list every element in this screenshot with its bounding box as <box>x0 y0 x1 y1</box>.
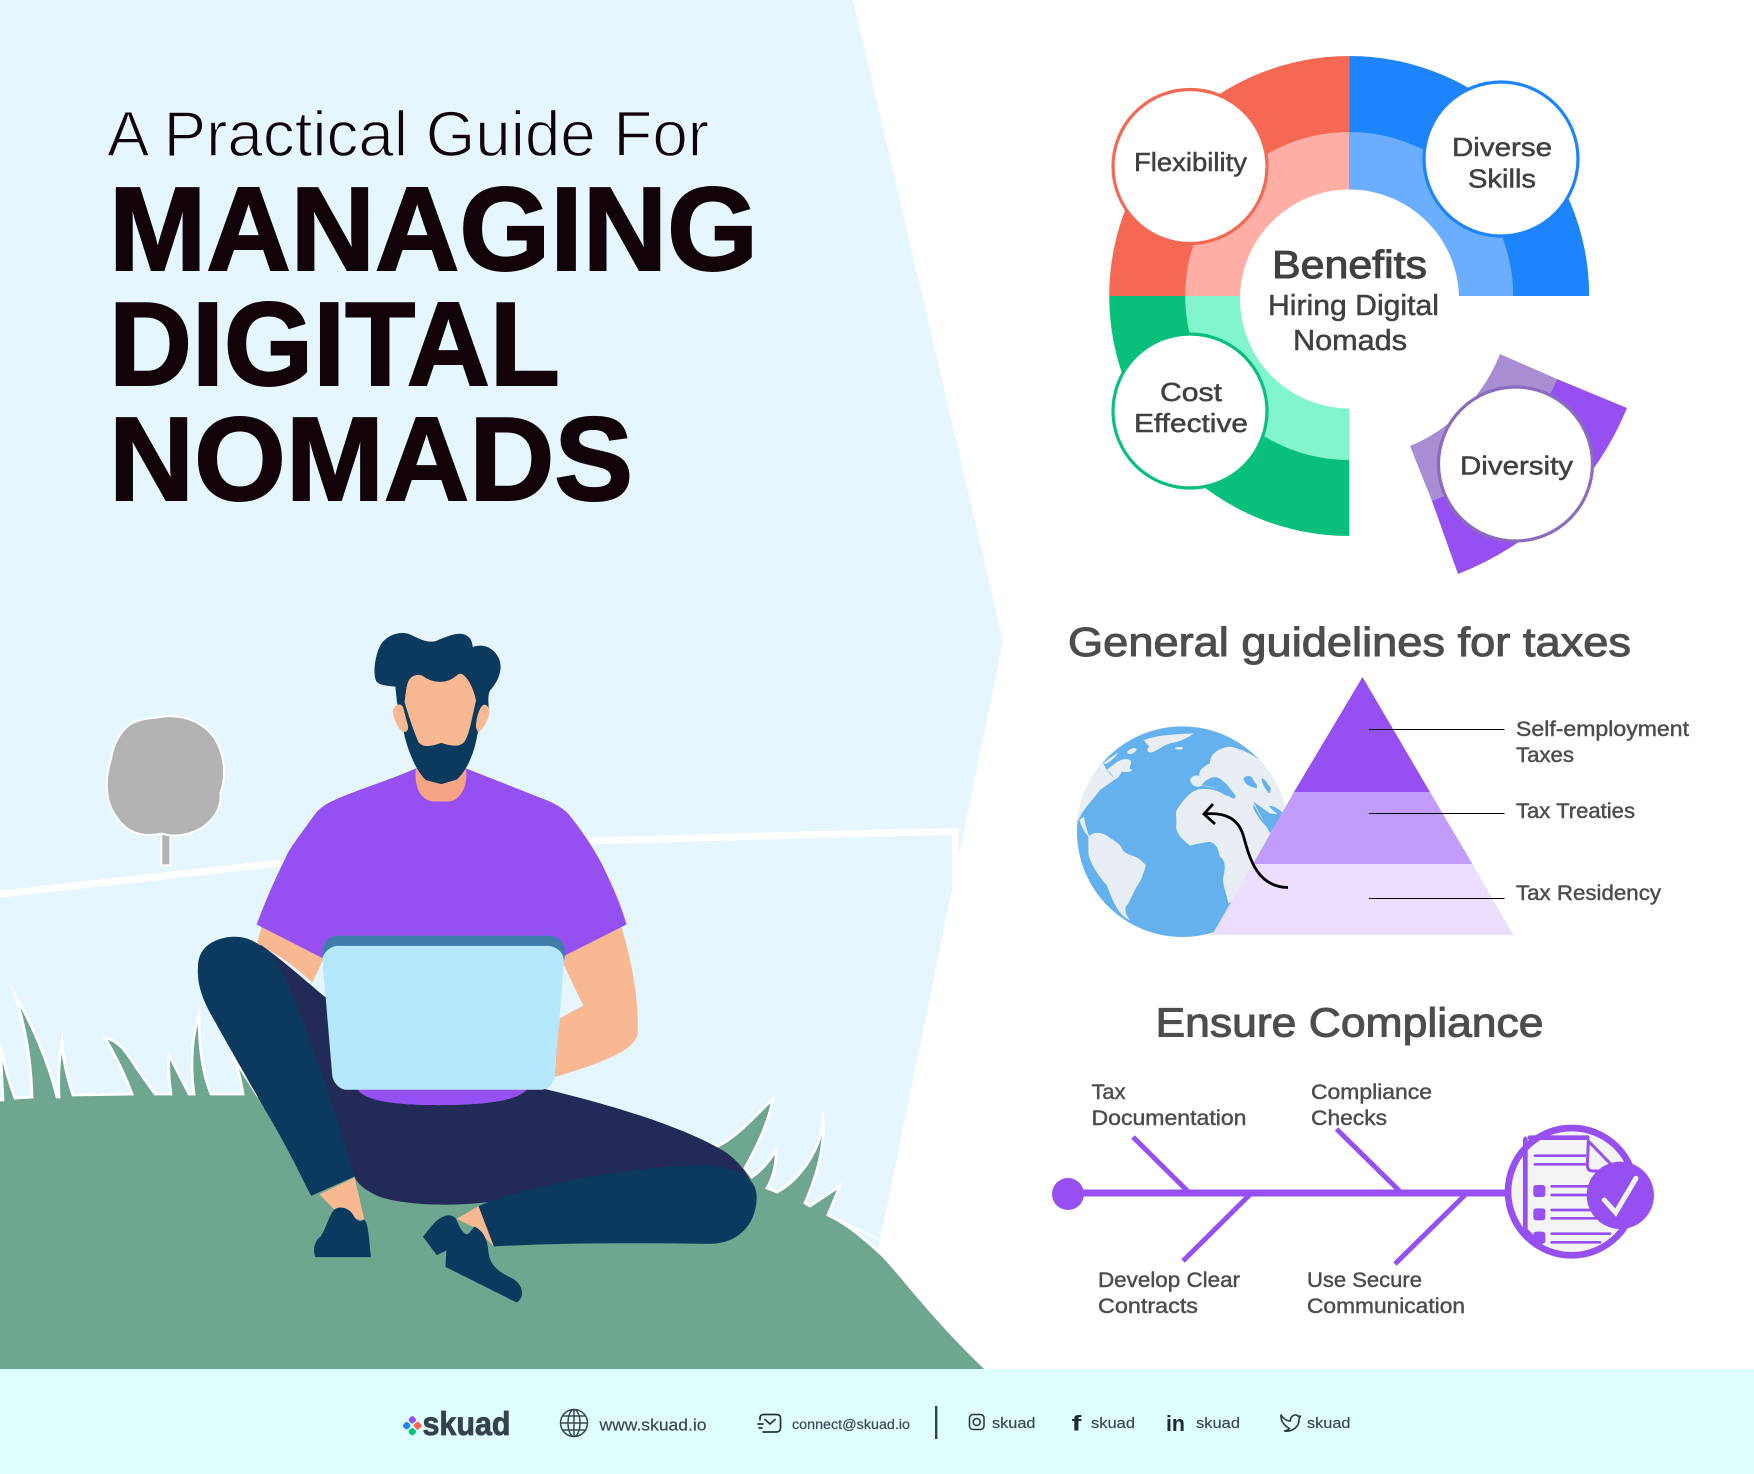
left leg <box>198 937 355 1196</box>
face <box>405 674 476 746</box>
circle: flexibility <box>1113 90 1267 244</box>
icon: instagram <box>970 1414 984 1430</box>
right ear <box>476 705 489 733</box>
quadrant: diverse skills <box>1349 56 1589 296</box>
text: email: connect@skuad.io <box>792 1417 910 1432</box>
quadrant: cost effective <box>1109 296 1349 536</box>
circle: diversity: Diversity <box>1460 450 1573 480</box>
branch: compliance checks <box>1336 1129 1400 1191</box>
pyramid tier: top <box>1294 677 1430 792</box>
title line: nomads: NOMADS <box>109 393 633 526</box>
laptop front <box>322 946 564 1090</box>
pyramid chart <box>1212 677 1514 935</box>
laptop back <box>322 936 565 971</box>
start dot <box>1052 1178 1084 1210</box>
footer bar <box>0 1369 1754 1474</box>
fishbone labels <box>1092 1080 1465 1318</box>
pyramid tier: middle <box>1253 792 1472 864</box>
icon: website globe <box>560 1410 588 1436</box>
inner white circle <box>1240 190 1459 408</box>
heading: benefits: Benefits <box>1272 244 1427 287</box>
arrow <box>1204 804 1288 888</box>
quadrant: flexibility <box>1109 56 1349 296</box>
right shoe <box>423 1215 522 1303</box>
grass hill <box>0 995 985 1372</box>
quadrant: diversity <box>1410 354 1627 574</box>
panel: light blue background <box>0 0 1003 1369</box>
circle: cost effective: Cost <box>1160 377 1223 407</box>
heading: ensure compliance: Ensure Compliance <box>1156 1000 1544 1046</box>
icon: compliance document with check <box>1508 1128 1654 1255</box>
branch: tax documentation <box>1133 1137 1188 1191</box>
t-shirt <box>257 768 627 1105</box>
icon: facebook: f <box>1072 1412 1083 1436</box>
text: facebook handle: skuad <box>1091 1415 1135 1432</box>
fishbone diagram <box>1052 1129 1510 1264</box>
pyramid tier: bottom <box>1212 864 1514 935</box>
text: twitter handle: skuad <box>1307 1415 1350 1432</box>
spine <box>1068 1190 1510 1196</box>
text: instagram handle: skuad <box>992 1415 1036 1432</box>
fishbone labels: Documentation <box>1092 1106 1246 1130</box>
title line: managing: MANAGING <box>109 163 758 296</box>
circle: diversity <box>1438 387 1592 541</box>
circle: diverse skills: Skills <box>1468 164 1536 194</box>
fishbone labels: Communication <box>1307 1294 1465 1318</box>
divider <box>935 1406 937 1439</box>
title line: digital: DIGITAL <box>109 278 560 411</box>
left arm <box>257 927 323 983</box>
right leg <box>479 1165 757 1246</box>
circle: diverse skills: Diverse <box>1452 132 1552 162</box>
neck <box>416 768 466 802</box>
left ear <box>393 704 408 732</box>
fishbone labels: Develop Clear <box>1098 1268 1240 1292</box>
fence line <box>0 828 963 1255</box>
icon: linkedin: in <box>1166 1411 1185 1436</box>
heading: general guidelines for taxes: General guidelines for taxes <box>1068 619 1631 665</box>
branch: use secure communication <box>1395 1195 1465 1264</box>
pyramid labels: Tax Residency <box>1516 881 1661 905</box>
icon: twitter <box>1281 1415 1300 1431</box>
hair and beard <box>375 633 501 784</box>
left ankle <box>319 1178 365 1221</box>
circle: cost effective <box>1113 334 1267 488</box>
text: nomads: Nomads <box>1293 325 1407 357</box>
fishbone labels: Checks <box>1311 1106 1387 1130</box>
pyramid labels: Tax Treaties <box>1516 799 1635 823</box>
trousers <box>260 944 755 1205</box>
pyramid labels <box>1369 717 1689 905</box>
logo: skuad: skuad <box>422 1405 510 1442</box>
text: website: www.skuad.io <box>598 1416 706 1434</box>
icon: email <box>758 1414 780 1432</box>
text: linkedin handle: skuad <box>1196 1415 1240 1432</box>
fishbone labels: Compliance <box>1311 1080 1432 1104</box>
circle: cost effective: Effective <box>1134 408 1248 438</box>
left shoe <box>314 1207 371 1257</box>
text: hiring digital: Hiring Digital <box>1268 290 1439 322</box>
fishbone labels: Tax <box>1092 1080 1126 1104</box>
circle: diverse skills <box>1424 82 1578 236</box>
icon: globe <box>1070 726 1300 937</box>
pyramid labels: Self-employment <box>1516 717 1689 741</box>
fishbone labels: Use Secure <box>1307 1268 1422 1292</box>
fishbone labels: Contracts <box>1098 1294 1198 1318</box>
subtitle line: A Practical Guide For <box>107 98 709 170</box>
title <box>107 98 758 526</box>
circle: flexibility: Flexibility <box>1134 147 1247 177</box>
right arm <box>555 927 638 1077</box>
branch: develop clear contracts <box>1183 1195 1250 1261</box>
panel: benefits wheel <box>1109 56 1627 574</box>
person working on laptop <box>198 633 757 1303</box>
right ankle <box>457 1206 494 1246</box>
pyramid labels: Taxes <box>1516 743 1574 767</box>
tree <box>107 716 224 865</box>
